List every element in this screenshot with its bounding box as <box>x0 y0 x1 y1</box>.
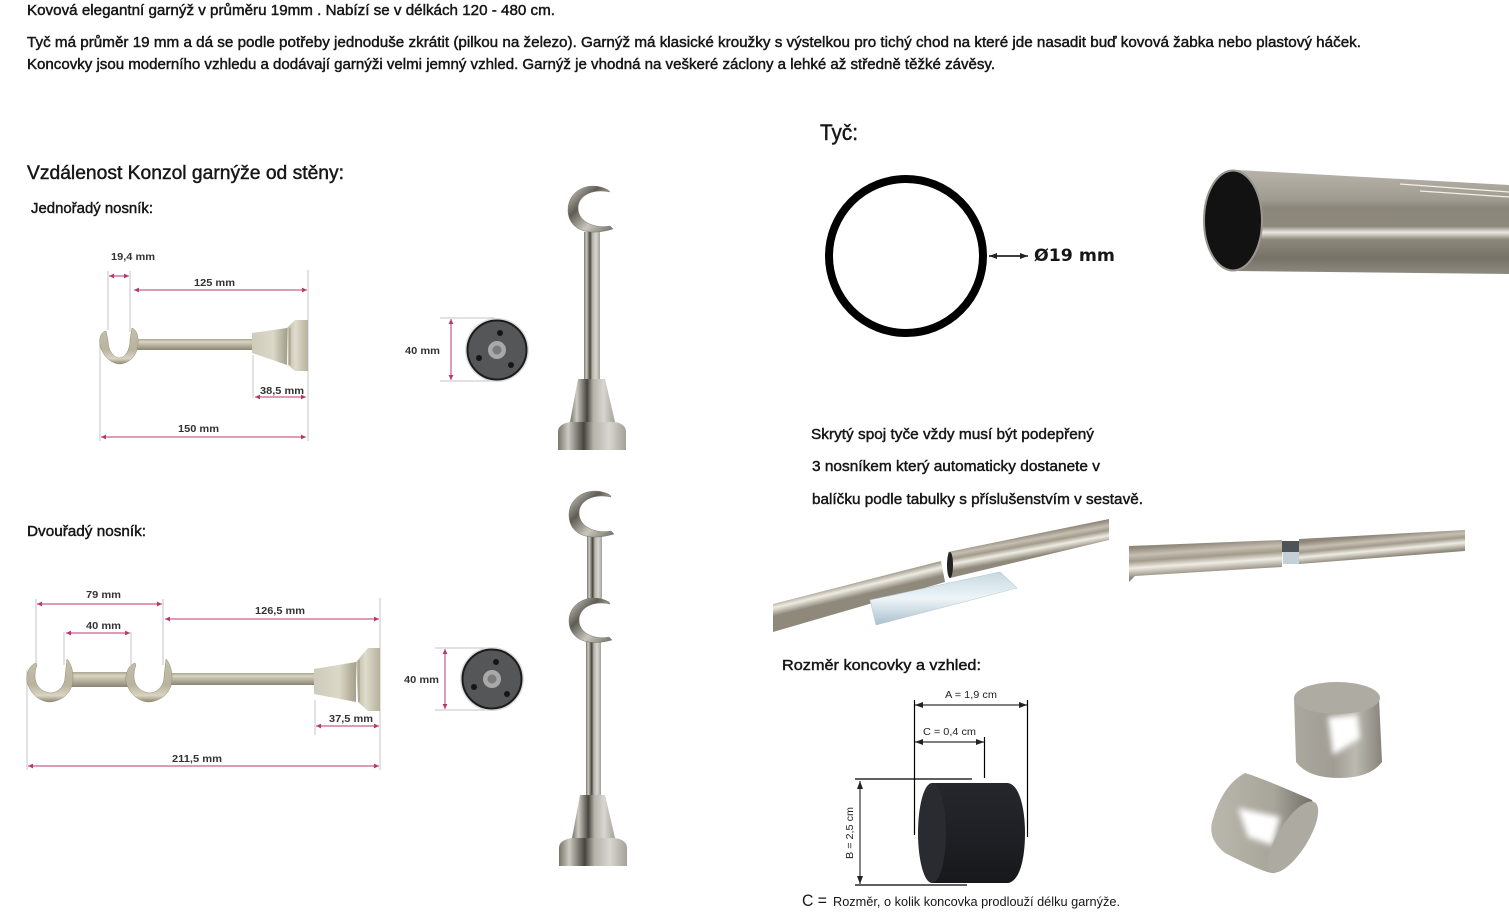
cap upright <box>1294 682 1382 778</box>
diagram: double bracket with dimensions: 37,5 mm <box>329 713 373 725</box>
diagram: double bracket with dimensions: 126,5 mm <box>255 605 305 617</box>
photo: double bracket vertical <box>559 491 627 866</box>
diagram: double bracket with dimensions: 79 mm <box>86 589 121 601</box>
heading: end cap size: Rozměr koncovky a vzhled: <box>782 657 981 674</box>
photo: rod joint assembled <box>1129 530 1465 582</box>
diagram: double bracket with dimensions: 40 mm <box>86 620 121 632</box>
cap tilted <box>1211 773 1327 880</box>
text: hidden joint note <box>811 426 1143 508</box>
intro text: Tyč má průměr 19 mm a dá se podle potřeby jednoduše zkrátit (pilkou na železo). Garnýž má klasické kroužky s výstelkou pro tichý chod na které jde nasadit buď kovová žabka nebo plastový háček. <box>27 35 1361 51</box>
icon: rod cross-section with diameter: Ø19 mm <box>1034 246 1115 266</box>
icon: rod cross-section with diameter <box>829 179 1115 333</box>
bracket side view <box>100 320 308 371</box>
intro text <box>27 3 1361 73</box>
diagram: double bracket base plate: 40 mm <box>404 674 439 686</box>
diagram: single bracket with dimensions: 38,5 mm <box>260 385 304 397</box>
diagram: double bracket base plate <box>404 647 524 711</box>
diagram: end cap dimensions: A = 1,9 cm <box>945 689 997 701</box>
text: hidden joint note: 3 nosníkem který automaticky dostanete v <box>812 458 1101 475</box>
diagram: single bracket with dimensions: 125 mm <box>194 277 235 289</box>
text: hidden joint note: Skrytý spoj tyče vždy musí být podepřený <box>811 426 1095 443</box>
heading: double bracket: Dvouřadý nosník: <box>27 523 146 540</box>
photo: nickel end caps <box>1211 682 1382 880</box>
diagram: double bracket with dimensions <box>27 589 380 770</box>
intro text: Koncovky jsou moderního vzhledu a dodávají garnýži velmi jemný vzhled. Garnýž je vhodná na veškeré záclony a lehké až středně těžké závěsy. <box>27 57 995 73</box>
diagram: end cap dimensions: C = <box>802 891 827 910</box>
diagram: end cap dimensions: C = 0,4 cm <box>923 726 976 738</box>
diagram: end cap dimensions: B = 2,5 cm <box>844 807 856 859</box>
diagram: single bracket with dimensions <box>100 251 308 441</box>
heading: single bracket: Jednořadý nosník: <box>31 200 153 217</box>
diagram: end cap dimensions: Rozměr, o kolik koncovka prodlouží délku garnýže. <box>833 895 1120 909</box>
text: hidden joint note: balíčku podle tabulky s příslušenstvím v sestavě. <box>812 491 1143 508</box>
black end cap <box>918 783 1025 883</box>
heading: wall distance: Vzdálenost Konzol garnýže od stěny: <box>27 163 344 184</box>
photo: rod tube <box>1204 170 1509 274</box>
heading: rod: Tyč: <box>820 120 858 145</box>
bracket side view <box>27 648 380 711</box>
diagram: single bracket base plate: 40 mm <box>405 345 440 357</box>
diagram: single bracket with dimensions: 150 mm <box>178 423 219 435</box>
diagram: double bracket with dimensions: 211,5 mm <box>172 753 222 765</box>
photo: single bracket vertical <box>558 186 626 450</box>
intro text: Kovová elegantní garnýž v průměru 19mm . Nabízí se v délkách 120 - 480 cm. <box>27 3 555 19</box>
photo: rod joint open <box>773 519 1109 632</box>
diagram: single bracket with dimensions: 19,4 mm <box>111 251 155 263</box>
diagram: end cap dimensions <box>802 689 1120 910</box>
diagram: single bracket base plate <box>405 318 529 382</box>
